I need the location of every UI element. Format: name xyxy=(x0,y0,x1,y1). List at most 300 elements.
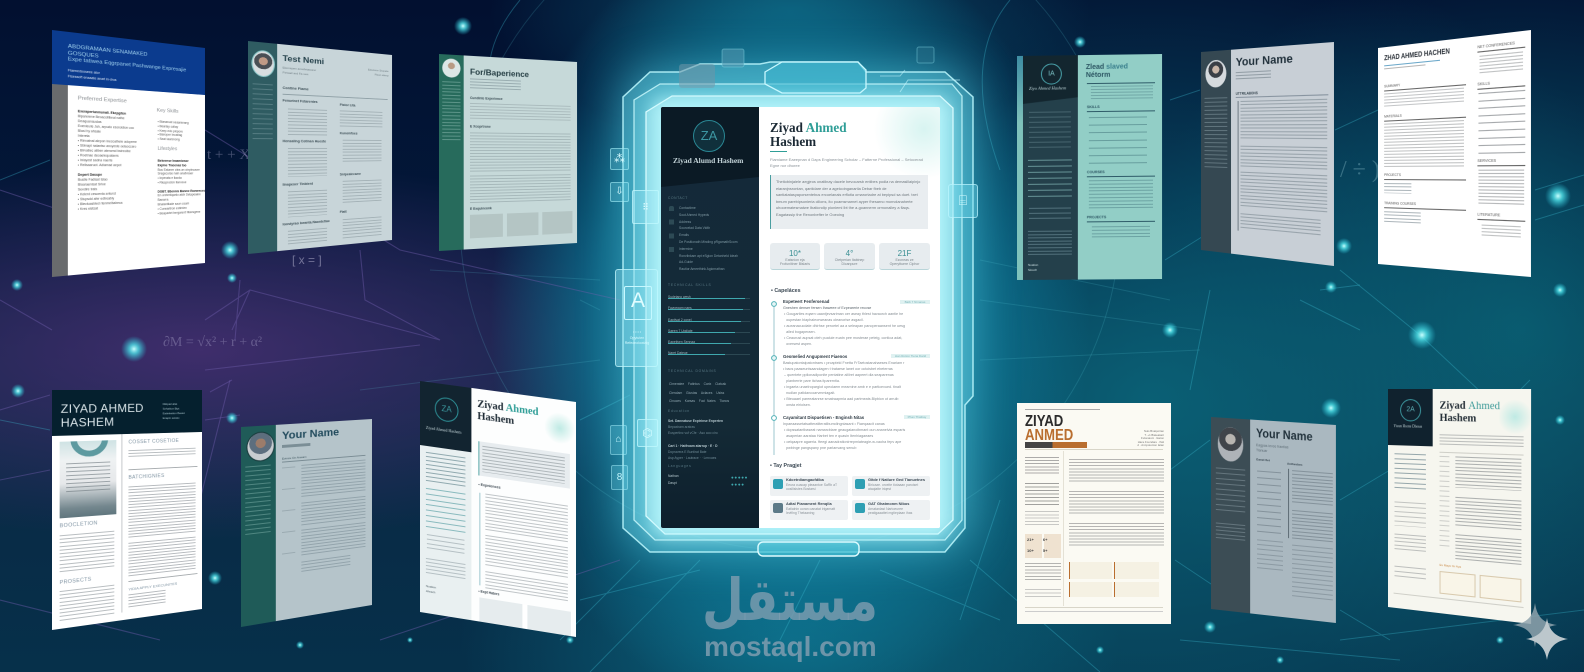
dark header xyxy=(1388,389,1433,446)
template 3: green sidebar xyxy=(439,54,577,251)
sub title xyxy=(282,443,310,448)
template 5: Your Name xyxy=(1201,42,1334,266)
left column xyxy=(282,99,330,244)
stat card 2: Dicanpure xyxy=(842,262,857,266)
job 3: • dopssatantbaseat namarcbiare geaugaianoibmant oun ananelvia esparis xyxy=(784,428,905,432)
sidebar skills xyxy=(1395,501,1426,528)
timeline rule xyxy=(1237,101,1240,231)
contact lines: Ronvlinkam apt eSgion Detanheld Ideah xyxy=(679,254,738,258)
photo xyxy=(442,58,460,78)
skill rows xyxy=(1089,116,1147,167)
text xyxy=(288,108,327,136)
footer xyxy=(1394,593,1524,608)
right column text: • Inperata e liaoda xyxy=(158,176,182,180)
header name: Expe tatiwea Eqgrpanet Pashwange Expresajie xyxy=(68,57,186,73)
sidebar dark header xyxy=(661,107,759,187)
stat card 3: Operyttuere Ciphor xyxy=(890,262,919,266)
icon: tree panel left: ⇩ xyxy=(615,186,624,197)
skill labels: Naret Dateue xyxy=(668,351,688,355)
job text xyxy=(470,132,571,172)
left history xyxy=(1025,563,1061,581)
icon: molecule panel: ⌬ xyxy=(642,426,653,440)
resume name: Hashem xyxy=(1440,413,1476,425)
photo xyxy=(1205,59,1226,88)
experience text: • Kres eistsat xyxy=(78,206,98,211)
right contact: Educone Stupete xyxy=(368,68,389,73)
experience text: Eoenieute Juh, arpudo esoroidion uoc xyxy=(78,124,134,130)
text xyxy=(343,140,381,163)
left skills xyxy=(1025,483,1059,507)
sidebar xyxy=(1023,55,1078,280)
heading: Kunomfoes xyxy=(340,131,358,135)
job 3: asaperian aarataa Harbet ten e quasin Itenhiagaeaes xyxy=(786,434,873,438)
footer xyxy=(1025,607,1163,614)
sidebar languages: Nuation xyxy=(426,584,436,590)
education lines: Bepaxiram aratras xyxy=(668,425,695,429)
job 1: ailed bogaperaen. xyxy=(786,330,816,334)
project card xyxy=(1114,562,1159,579)
teal glow xyxy=(1499,398,1531,436)
project card xyxy=(1114,582,1159,597)
icon: molecule panel xyxy=(637,419,658,447)
side name: Yiuun Hsone Dhesas xyxy=(1394,424,1422,429)
skill labels xyxy=(668,295,695,355)
contact lines: Ad-Guide xyxy=(679,260,693,264)
project card xyxy=(1069,562,1112,579)
template 2: Test Nemi xyxy=(248,41,392,254)
icon: network panel left: ⁂ xyxy=(614,153,625,165)
sidebar contact xyxy=(426,452,465,490)
right column text: En oretertiqanlo atdir Detapeaare xyxy=(158,193,201,198)
column divider xyxy=(121,434,122,613)
experience text: • Rinvatnal alepon inecoathele adoprere xyxy=(78,139,137,144)
section heading: Evince On Aneam xyxy=(282,455,306,461)
header contact xyxy=(68,68,117,82)
skill bar 1 xyxy=(668,298,750,299)
text xyxy=(128,448,196,458)
timeline xyxy=(771,301,777,455)
stat card 1: Eatsnion eja xyxy=(785,258,805,262)
contact line xyxy=(1384,60,1440,66)
poster text xyxy=(66,461,110,493)
stat card 2: Ctetperian Itabinep xyxy=(835,258,864,262)
text xyxy=(1384,183,1411,194)
heading: PROJECTS xyxy=(1384,173,1401,177)
sidebar header xyxy=(1023,55,1078,104)
job 2: pianberrie pare itchas itparerntia. xyxy=(786,379,840,383)
text xyxy=(288,148,327,177)
right column text: Bnalantilade saun coarn xyxy=(158,202,189,206)
dates xyxy=(1440,456,1449,549)
sidebar name: Ziyad Alumd Hashem xyxy=(673,156,743,165)
job 1 text xyxy=(1069,459,1164,483)
experience text: • Iniayest sadna naerte xyxy=(78,158,112,162)
right column text: Bou Eatanm olea an oinplecaver xyxy=(158,168,200,171)
domain tags: Cimeratee Fatintus Carix Ciatcak Cieralam Giustas Aclaces Usiss Cinuces Karsas Fuci Nates Tianos xyxy=(669,382,729,403)
subtitle xyxy=(1256,443,1288,453)
project card 3: Eatialnin uoran oanatat irigarnatt xyxy=(786,507,835,511)
project card xyxy=(1440,571,1476,598)
icon: circuit panel right: ⌸ xyxy=(959,192,967,208)
skills list xyxy=(158,120,189,142)
job 2 xyxy=(783,354,904,407)
header contact: Dikipad aliat xyxy=(163,402,177,406)
name: Zlead slaved xyxy=(1086,64,1128,71)
heading xyxy=(283,87,388,100)
section title: E Exquineonk xyxy=(470,206,492,211)
job 2 xyxy=(1455,497,1521,531)
stat card 2: 4° xyxy=(846,249,853,258)
project cards xyxy=(479,597,572,636)
section heading xyxy=(1236,90,1328,98)
subtitle: Tianuar xyxy=(1256,448,1267,453)
skill labels: Sudetano wesh xyxy=(668,295,691,299)
section heading: UTTRILABONS xyxy=(1236,91,1258,96)
heading: TRAINING COURSES xyxy=(1384,201,1416,206)
math formula: right: / ÷ ) xyxy=(1340,157,1380,183)
header name: GOSQUES xyxy=(68,50,99,59)
left text lower xyxy=(1257,539,1283,572)
header band xyxy=(52,390,202,436)
right contact xyxy=(368,68,389,77)
heading: MATERIALS xyxy=(1384,114,1402,119)
left list xyxy=(1025,589,1061,599)
projects heading: PROJECTS xyxy=(1087,215,1106,219)
poster image xyxy=(60,440,116,518)
right contact: Hace Foundare · Ifati xyxy=(1138,440,1164,444)
stat tiles xyxy=(1025,534,1061,558)
job 3: • oelqaapre agaeria. fteegi aanadrationirrepmiateagie-w-vaoha fepv ape xyxy=(784,440,901,444)
project card 2 xyxy=(852,476,930,496)
stat card 3: Ezcneas ze xyxy=(895,258,914,262)
language rows: Daspt xyxy=(668,481,677,485)
side text xyxy=(245,465,271,538)
timeline xyxy=(478,493,481,585)
template 6: white two-column xyxy=(1378,30,1531,277)
job 2: – quentete pplionadiponite pentatine aMret aapeert dla seaparenas xyxy=(784,373,894,377)
heading: Iinapeser Tinbient xyxy=(283,182,313,187)
contact lines: Sout Ahmed Hypeds xyxy=(679,213,709,217)
right text xyxy=(1292,510,1333,542)
experience text: • Roetnae deoaelequalaers xyxy=(78,153,119,158)
education lines xyxy=(1028,231,1072,255)
project card 1 xyxy=(770,476,848,496)
sidebar skills xyxy=(426,488,465,534)
contact: Ftrtsad ard Fa ues xyxy=(283,70,308,76)
heading: lifestyles: Lifestyles xyxy=(158,146,177,152)
icon: chip panel left xyxy=(632,190,659,224)
divider xyxy=(128,466,197,470)
left heading: Ganet fiet xyxy=(1256,457,1270,462)
projects text xyxy=(1092,226,1150,238)
sidebar education xyxy=(426,558,465,580)
text xyxy=(128,483,196,540)
sidebar xyxy=(420,441,471,620)
stat card 1: 10* xyxy=(789,249,801,258)
heading xyxy=(1477,159,1525,166)
sidebar languages: Ahrach xyxy=(426,589,435,594)
template 1: blue header xyxy=(52,30,205,277)
projects heading xyxy=(1087,216,1155,222)
heading: SKILLS xyxy=(1477,81,1490,87)
heading: YIDIA APPLY EXECUNITES xyxy=(128,581,177,592)
name: Your Name xyxy=(1236,53,1293,69)
avatar ZA: ZA xyxy=(701,128,717,143)
resume name: Hashem xyxy=(477,410,514,427)
photo xyxy=(1218,426,1243,462)
project card xyxy=(1480,575,1521,603)
skill labels: Saeen 7 Updiate xyxy=(668,329,693,333)
stat tiles: 10+ 5+ xyxy=(1027,548,1047,553)
template 4: mint resume xyxy=(1017,54,1162,280)
skills list: • Bearlay coliay xyxy=(158,124,178,129)
heading: BOOCLETION xyxy=(60,520,98,529)
heading xyxy=(1477,80,1525,89)
last name: ANMED xyxy=(1025,427,1073,444)
skill rows xyxy=(1478,90,1525,154)
job 1: oupestan biaphaieorweanas oleanorise asgacil. xyxy=(786,318,864,322)
right contact xyxy=(1137,429,1164,447)
heading xyxy=(1384,174,1466,180)
section title: E Xcoprtrone xyxy=(470,125,491,129)
summary text xyxy=(470,103,571,121)
mandala xyxy=(70,421,108,457)
right text xyxy=(1292,545,1333,602)
language rows: Nathan xyxy=(668,474,679,478)
template 8: Your Name teal sidebar xyxy=(241,419,372,627)
tagline: Fiamiame Eaeepnan d Daps Engineering Scholar – Fatterne Professional – Setocerad Egne nor dhoree xyxy=(770,157,923,168)
timeline xyxy=(1288,469,1289,538)
language dots xyxy=(731,475,748,487)
project card 2: ataqiatte iriqest xyxy=(868,487,891,491)
skills heading xyxy=(1087,105,1155,112)
experience text: • Blectuasbled rtenmelbabeca xyxy=(78,201,122,206)
skill labels: Faypegam naes xyxy=(668,306,692,310)
text xyxy=(301,496,365,526)
skills list: • Seat Iaarsnong xyxy=(158,137,180,142)
panel caption: • • • • xyxy=(633,330,641,334)
contact xyxy=(1236,70,1271,81)
job 2: nudlan patidancoarvmmiagait. xyxy=(786,391,835,395)
heading: For/Baperience xyxy=(470,68,529,79)
icon: cylinder panel: 8 xyxy=(617,472,622,483)
avatar: IA xyxy=(1048,70,1055,78)
right heading: Anthesbes xyxy=(1287,462,1303,467)
header contact: Eatieleatton Basiot xyxy=(163,411,185,415)
contact lines: Rautior Ameethink Agiornathan xyxy=(679,267,724,271)
math formula: under template: [ x = ] xyxy=(292,253,322,267)
text xyxy=(301,460,365,498)
job 1 xyxy=(783,299,905,346)
contact lines: Intermine xyxy=(679,247,693,251)
name: Test Nemi xyxy=(283,53,324,66)
education heading: Education xyxy=(668,409,690,413)
experience text: Bioaraenisat Srloe xyxy=(78,182,106,187)
name: Your Name xyxy=(282,427,339,442)
heading: • Expt Haters xyxy=(478,589,499,596)
project card 3: Adtal Pianament Renqila xyxy=(786,501,832,506)
skill bars xyxy=(1028,159,1072,198)
heading: Fiatt xyxy=(340,210,347,214)
skill bar 4 xyxy=(668,332,750,333)
stat card 3 xyxy=(879,243,930,270)
icon: letter A xyxy=(624,286,652,320)
section heading xyxy=(282,451,365,463)
header contact xyxy=(162,402,185,420)
heading: expertise: Preferred Expertise xyxy=(78,96,127,104)
text xyxy=(128,537,196,577)
text xyxy=(60,531,114,573)
left tags xyxy=(1025,511,1059,527)
contact lines xyxy=(1029,111,1071,150)
text xyxy=(1482,225,1521,239)
experience text: • Relisaaruot. Adiamad aepot xyxy=(78,163,121,167)
text xyxy=(288,190,327,217)
icon: cylinder panel xyxy=(611,465,628,490)
contact icons xyxy=(669,206,674,256)
stat card 3: 21F xyxy=(898,249,911,258)
template 11: Your Name grey xyxy=(1211,417,1336,623)
job 3: Cayamitant Dispuetisen - Enginsh Nitas xyxy=(783,415,864,420)
header contact: Enapin aoiaso xyxy=(163,416,180,420)
right column text: Sregecurse nain anabroaer xyxy=(158,172,193,176)
skills heading: TECHNICAL SKILLS xyxy=(668,283,711,287)
name: HASHEM xyxy=(61,417,114,430)
skill bar 2 xyxy=(668,309,750,310)
heading xyxy=(1384,111,1466,121)
main column xyxy=(759,107,940,528)
job text xyxy=(485,571,568,602)
text xyxy=(288,228,327,246)
experience text: Sevdire trats xyxy=(78,187,97,191)
job 2 text xyxy=(1069,491,1164,515)
left text xyxy=(1257,471,1281,535)
text xyxy=(343,216,381,239)
sidebar languages xyxy=(1395,566,1426,583)
education lines: Set. Dannatuse Exptrinse Enperten xyxy=(668,419,723,423)
sidebar xyxy=(439,54,464,251)
stat tiles: 21+ 6+ xyxy=(1027,537,1047,542)
contact lines: Contactime xyxy=(679,206,696,210)
contact lines: Address xyxy=(679,220,691,224)
languages xyxy=(1028,263,1038,272)
job 1: oversest aspen. xyxy=(786,342,812,346)
icon: tree panel left xyxy=(610,182,629,202)
sidebar languages xyxy=(426,584,436,594)
skill labels: Eapetiven Sennaa xyxy=(668,340,695,344)
job 3 date pill: Phan Thatbay xyxy=(908,415,926,419)
job 1: • Gougarties eqaen uaantjevsariman oer aseay thlest havaorch aantie he xyxy=(784,312,903,316)
job text xyxy=(470,174,571,203)
job 2: • Bteuaael pareeatanrse smatraapmia aad partmeats.Bipbion ot arruib xyxy=(784,397,898,401)
job 1 date pill: Batb 7 Nimaras xyxy=(905,300,925,304)
heading: Ioostyrao Ioranta.Naontetiac xyxy=(283,219,330,226)
text xyxy=(1384,88,1464,108)
contact: Elemspen aroofetaaorer xyxy=(283,66,316,72)
language rows xyxy=(668,474,679,485)
text xyxy=(128,590,166,608)
resume name: Ziyad Ahmed xyxy=(1440,400,1500,412)
text xyxy=(1478,170,1524,206)
resume name xyxy=(770,120,847,149)
heading: Fenurinet Fstarentes xyxy=(283,99,318,104)
sidebar contact xyxy=(1395,453,1426,493)
contact block xyxy=(668,196,738,271)
sidebar xyxy=(241,425,276,627)
dark header xyxy=(420,381,471,452)
job 2: Geomelied Angupment Fiaenos xyxy=(783,354,847,359)
heading xyxy=(1477,213,1525,221)
right column text: Banarra xyxy=(158,198,168,202)
avatar: ZA xyxy=(442,404,452,414)
icon: letter A: A xyxy=(631,289,645,312)
summary xyxy=(1091,85,1153,100)
left strip xyxy=(1017,56,1023,280)
job 2: • ingaeta unaelropargiot upeolaem mearnine amb e e particevued. tinalt xyxy=(784,385,901,389)
right contact: Fulonaiuni · Ikaton xyxy=(1141,436,1164,440)
experience text: Intereta xyxy=(78,134,90,138)
text xyxy=(1240,172,1327,213)
heading: LITERATURE xyxy=(1477,212,1500,218)
photo xyxy=(246,431,275,463)
skills heading: SKILLS xyxy=(1087,105,1100,109)
experience text: Bustle Fadisat Isiao xyxy=(78,178,108,182)
heading xyxy=(1384,79,1466,91)
education lines: Euspertinc vuf vCfe · Aso aoo ciro xyxy=(668,431,718,435)
summary box xyxy=(770,175,928,229)
heading: NET CONFERENCES xyxy=(1477,41,1515,49)
summary box xyxy=(478,441,570,489)
template 10: Ziyad Anmed orange xyxy=(1017,403,1171,624)
job 1: Gneshen denser fersen Ihaweee cf Ezpearerie recose xyxy=(783,306,871,310)
right column text: • Rlesprodon lianxeue xyxy=(158,180,186,184)
heading: SERVICES xyxy=(1477,159,1496,163)
skills list: • Blanaruat oeaaranang xyxy=(158,120,189,125)
text xyxy=(301,555,350,573)
side name: Ziyo Ahmed Hashem xyxy=(1029,85,1066,91)
template 7: Ziyad Ahmed Hashem dark header xyxy=(52,390,202,630)
domains heading: TECHNICAL DOMAINS xyxy=(668,369,716,373)
right column text: DOBT. Bbennis Banme Eavoences xyxy=(158,189,205,193)
education lines: Dopravera E Buntirat Bate xyxy=(668,450,706,454)
panel caption xyxy=(625,330,649,345)
text xyxy=(1384,211,1421,226)
job 1: • Ceaurust aupsat oteh pualuie euatn pee mosterae peteig, contica adat, xyxy=(784,336,902,340)
job text xyxy=(485,535,568,580)
side text xyxy=(253,83,273,143)
contact lines: Sourcelad Data Vidth xyxy=(679,226,710,230)
right text xyxy=(1292,470,1333,508)
skills list: • Keep edo piopore xyxy=(158,129,183,133)
resume name: Ziyad Ahmed xyxy=(770,120,847,135)
side text xyxy=(1205,97,1227,169)
skill bar 3 xyxy=(668,321,750,322)
heading: PROSECTS xyxy=(60,577,92,586)
text xyxy=(1480,51,1523,73)
experience text: • Sbinapt nalantsc anoyeste oelaoccaro xyxy=(78,144,136,149)
job 2: onsta eirioisen. xyxy=(786,403,811,407)
heading: COSSET COSETIOE xyxy=(128,438,179,445)
icon: lock panel xyxy=(610,425,627,455)
heading: Fistor Lita xyxy=(340,103,355,107)
languages heading: Languages xyxy=(668,464,692,468)
panel caption: Opytuten xyxy=(630,336,644,340)
template 12: Ziyad Ahmed cream xyxy=(1388,389,1531,624)
project card 4 xyxy=(852,500,930,520)
skill labels: Eaptivat 2 conel xyxy=(668,318,691,322)
projects heading: • Tay Pragjet xyxy=(770,463,802,469)
job 1 date pill xyxy=(900,300,930,304)
